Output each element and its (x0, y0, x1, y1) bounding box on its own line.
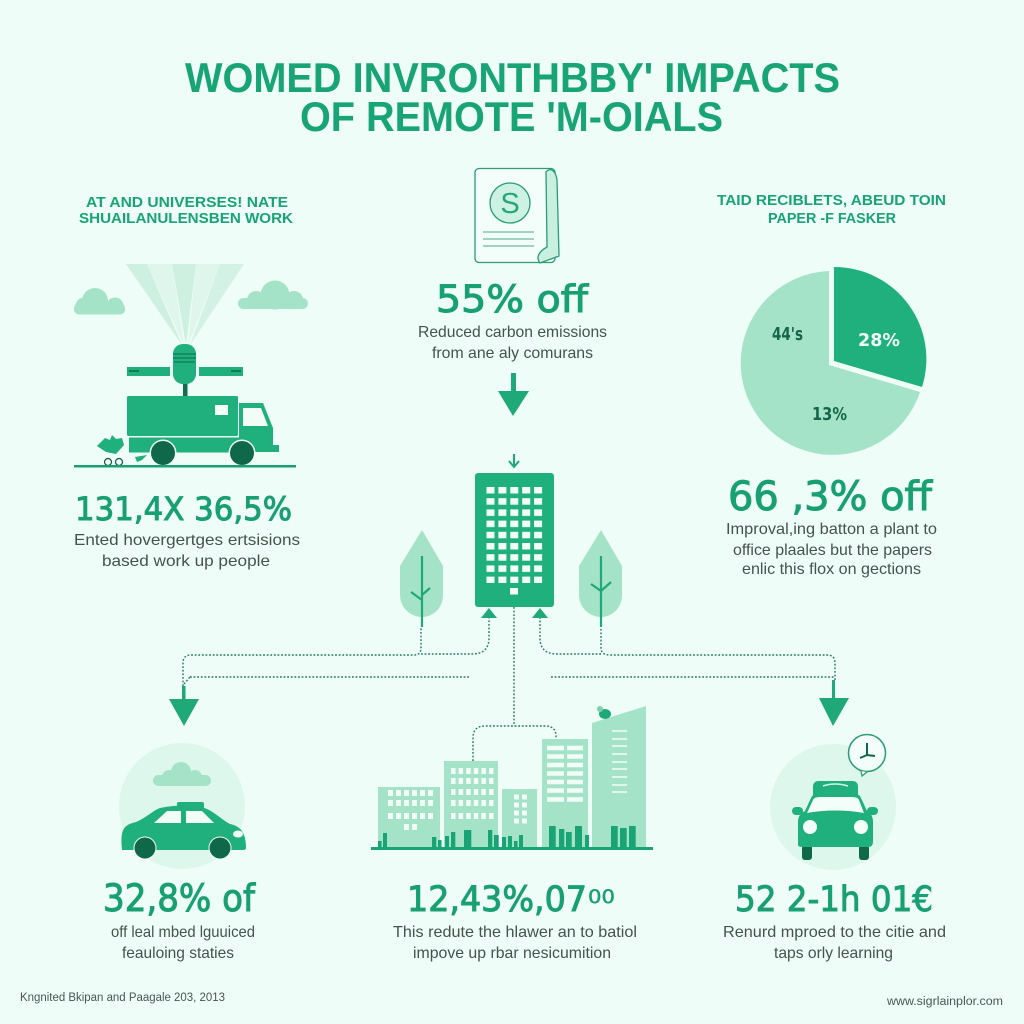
icon: loudspeaker mast (127, 344, 243, 396)
icon: truck with loudspeaker and clouds (74, 264, 308, 468)
street line (371, 847, 653, 850)
icon: small arrow above building (509, 454, 519, 467)
text: bottom centre description: impove up rbar nesicumition (413, 945, 611, 962)
pie slice: 28% (834, 267, 926, 387)
text: right description: Improval,ing batton a plant to (726, 521, 937, 538)
title: OF REMOTE 'M-OIALS (300, 93, 723, 140)
footer: website: www.sigrlainplor.com (886, 996, 1003, 1008)
icon: sedan car with cloud (119, 743, 246, 869)
text: right description (726, 521, 937, 578)
icon: clock bubble (848, 734, 886, 776)
illustration: city skyline (371, 706, 653, 850)
chart: pie (741, 267, 926, 455)
text: left description: Ented hovergertges ertsisions (74, 532, 300, 549)
panel: left column heading: SHUAILANULENSBEN WORK (79, 211, 294, 227)
stat: left: 131,4X 36,5% (75, 490, 292, 528)
text: right description: office plaales but the papers (733, 542, 932, 559)
icon: truck body (127, 396, 279, 466)
stat: bottom left: 32,8% of (103, 877, 256, 920)
stat: bottom centre: 12,43%,07 (407, 880, 587, 920)
arrow: right down (819, 680, 849, 726)
car body (121, 802, 246, 860)
footer: source: Kngnited Bkipan and Paagale 203, 2013 (20, 992, 225, 1004)
arrow: up into building right (532, 608, 548, 618)
icon: document with S coin: S (500, 188, 520, 220)
text: centre description (418, 324, 607, 362)
panel: right column heading (717, 193, 946, 227)
icon: central office building (475, 473, 554, 607)
pie slice: light (741, 271, 920, 455)
car front (792, 781, 878, 860)
text: bottom right description: Renurd mproed to the citie and (723, 924, 946, 941)
arrow: up into building left (481, 608, 497, 618)
icon: rooftop leaf (597, 706, 611, 719)
pie label: 44%: 44's (772, 324, 803, 345)
text: bottom left description (111, 924, 255, 962)
text: centre description: Reduced carbon emissions (418, 324, 607, 341)
ground line (74, 465, 296, 468)
text: bottom left description: off leal mbed lguuiced (111, 924, 255, 941)
icon: document with S coin (475, 168, 559, 263)
windows (388, 731, 627, 827)
text: left description: based work up people (102, 553, 270, 570)
small trees along street (378, 826, 636, 848)
text: left description (74, 532, 300, 570)
icon: left cloud (74, 288, 125, 314)
icon: right cloud (238, 280, 308, 310)
connectors: dotted flow lines (183, 607, 835, 761)
panel: right column heading: PAPER -F FASKER (768, 211, 897, 227)
text: bottom centre description (393, 924, 637, 962)
panel: left column heading: AT AND UNIVERSES! NATE (86, 195, 288, 211)
icon: debris at rear of truck (97, 435, 147, 466)
stat: bottom right: 52 2-1h 01€ (735, 880, 933, 920)
icon: light beams (126, 264, 244, 345)
arrow: centre down (498, 373, 529, 416)
panel: right column heading: TAID RECIBLETS, ABEUD TOIN (717, 193, 946, 209)
text: bottom centre description: This redute the hlawer an to batiol (393, 924, 637, 941)
icon: front-view car with clock (770, 734, 896, 870)
buildings (378, 706, 646, 848)
pie label: 13%: 13% (812, 404, 847, 425)
text: bottom left description: feauloing staties (122, 945, 234, 962)
text: bottom right description (723, 924, 946, 962)
title (185, 54, 840, 140)
text: centre description: from ane aly comurans (432, 345, 593, 362)
pie label: 28%: 28% (858, 330, 900, 351)
title: WOMED INVRONTHBBY' IMPACTS (185, 54, 840, 101)
stat: right: 66 ,3% off (728, 474, 933, 520)
panel: left column heading (79, 195, 294, 227)
icon: cloud over car (153, 762, 211, 786)
stat: 55% off: 55% off (436, 278, 590, 321)
stat: bottom centre: 00 (588, 886, 615, 908)
icon: right tree (579, 530, 622, 627)
arrow: left down (169, 686, 199, 726)
text: bottom right description: taps orly learning (774, 945, 893, 962)
text: right description: enlic this flox on gections (742, 561, 921, 578)
icon: left tree (400, 530, 443, 627)
